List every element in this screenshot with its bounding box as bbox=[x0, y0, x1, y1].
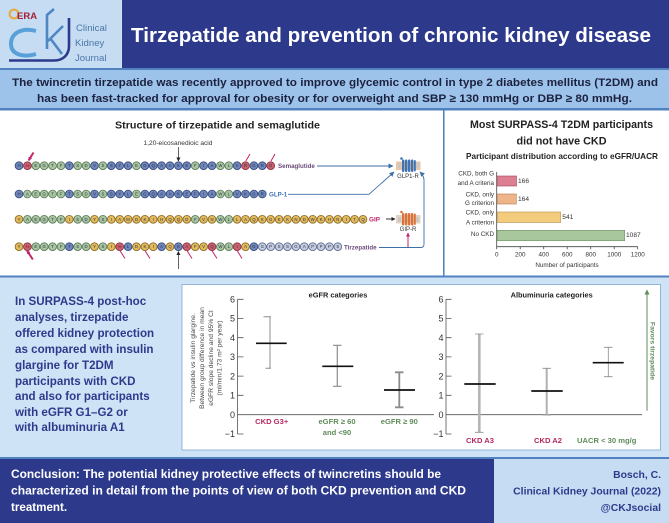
peptide chain: semaglutide bbox=[15, 162, 275, 170]
y-axis title: eGFR slope decline and 95% CI bbox=[208, 310, 215, 406]
chart: eGFR categories: −1 bbox=[225, 429, 235, 439]
citation panel: @CKJsocial bbox=[601, 503, 661, 514]
bar chart: participants by criteria: 1000 bbox=[607, 252, 622, 258]
chart: eGFR categories: and <90 bbox=[323, 428, 351, 437]
chart: eGFR categories: eGFR ≥ 60 bbox=[318, 417, 356, 426]
y-axis title: Tirzepatide vs insulin glargine. bbox=[190, 313, 197, 403]
peptide chain: GLP-1: HAEGTFTSDVSSYLEGQAAKEFIAWLVKGR bbox=[17, 192, 264, 196]
bar chart: participants by criteria: 800 bbox=[585, 252, 596, 258]
bar chart: participants by criteria bbox=[458, 170, 645, 269]
subheading: chart title: Participant distribution according to eGFR/UACR bbox=[466, 151, 658, 161]
conclusion panel: characterized in detail from the points of view of both CKD prevention and CKD bbox=[11, 484, 466, 498]
summary band: has been fast-tracked for approval for obesity or for overweight and SBP ≥ 130 mmHg or DBP ≥ 80 mmHg. bbox=[37, 93, 632, 105]
peptide chain: tirzepatide: Aib bbox=[26, 245, 30, 249]
bar chart: participants by criteria: 200 bbox=[515, 252, 526, 258]
conclusion panel: treatment. bbox=[11, 501, 67, 514]
bar chart: participants by criteria: 541 bbox=[562, 214, 574, 221]
peptide chain: semaglutide: Aib bbox=[26, 164, 30, 168]
summary band: The twincretin tirzepatide was recently approved to improve glycemic control in type 2 diabetes mellitus (T2DM) and bbox=[12, 77, 658, 89]
bar chart: participants by criteria: No CKD bbox=[471, 231, 494, 238]
text block: post-hoc analyses: In SURPASS-4 post-hoc bbox=[15, 295, 147, 308]
citation panel: Bosch, C. bbox=[613, 470, 661, 481]
arrow: favors tirzepatide bbox=[647, 290, 656, 411]
panel: structure of tirzepatide and semaglutide bbox=[0, 110, 445, 276]
bar chart: participants by criteria: G criterion bbox=[465, 200, 494, 207]
bar chart: participants by criteria: Number of participants bbox=[535, 262, 599, 269]
arrow: tirzepatide to GLP1-R bbox=[379, 172, 424, 248]
icon: ERA logo: ERA bbox=[17, 11, 37, 22]
sequence label: tirzepatide: Tirzepatide bbox=[344, 244, 377, 252]
sequence label: GLP-1: GLP-1 bbox=[269, 192, 288, 198]
conclusion panel: Conclusion: The potential kidney protective effects of twincretins should be bbox=[11, 468, 442, 481]
peptide chain: GIP: YAEGTFISDYSIAMDKIHQQDFVNWLLAQKGKKNDWKHNITQ bbox=[18, 217, 365, 222]
bar chart: participants by criteria: 164 bbox=[518, 196, 529, 203]
icon: GLP1-R receptor bbox=[396, 157, 420, 180]
text block: post-hoc analyses: as compared with insulin bbox=[15, 343, 154, 356]
chart: eGFR categories bbox=[225, 290, 434, 439]
bar chart: participants by criteria: 400 bbox=[538, 252, 549, 258]
bar chart: participants by criteria: CKD, only bbox=[466, 209, 495, 216]
text block: post-hoc analyses: offered kidney protection bbox=[15, 327, 154, 340]
peptide chain: tirzepatide bbox=[15, 243, 342, 251]
chart: eGFR categories: CKD G3+ bbox=[255, 417, 289, 426]
bar chart: participants by criteria: 0 bbox=[495, 252, 499, 258]
chart: eGFR categories: 5 bbox=[230, 314, 235, 324]
sequence label: semaglutide: Semaglutide bbox=[278, 163, 315, 170]
chart: albuminuria categories: 4 bbox=[438, 333, 444, 343]
text block: post-hoc analyses: analyses, tirzepatide bbox=[15, 311, 129, 324]
chart: eGFR categories: 0 bbox=[230, 410, 235, 420]
peptide chain: GIP bbox=[15, 215, 367, 223]
chart: eGFR categories: 3 bbox=[230, 352, 235, 362]
journal name: Journal bbox=[75, 53, 106, 64]
chart: albuminuria categories: CKD A2 bbox=[534, 436, 562, 445]
chart: eGFR categories: 2 bbox=[230, 371, 235, 381]
header title bar bbox=[122, 0, 669, 68]
text block: post-hoc analyses: and also for participants bbox=[15, 390, 150, 403]
icon: GIP-R receptor bbox=[396, 211, 420, 233]
sequence label: GIP: GIP bbox=[369, 216, 381, 224]
arrow: GIP to GIP-R bbox=[386, 218, 395, 220]
arrows: fatty acid attachment bbox=[177, 147, 179, 269]
bar chart: participants by criteria: and A criteria bbox=[458, 180, 494, 187]
text block: post-hoc analyses: with albuminuria A1 bbox=[14, 421, 125, 434]
chart: albuminuria categories: UACR < 30 mg/g bbox=[577, 436, 637, 445]
peptide chain: tirzepatide: Aib bbox=[118, 245, 122, 249]
bar chart: participants by criteria: 600 bbox=[562, 252, 573, 258]
y-axis title: Between group difference in mean bbox=[199, 307, 206, 409]
heading: structure: Structure of tirzepatide and semaglutide bbox=[115, 120, 320, 132]
chart: albuminuria categories: 2 bbox=[438, 371, 444, 381]
bar chart: participants by criteria: A criterion bbox=[466, 219, 494, 226]
text block: post-hoc analyses: with eGFR G1–G2 or bbox=[14, 406, 128, 419]
bar chart: participants by criteria: 166 bbox=[518, 178, 529, 185]
chart: eGFR categories: 1 bbox=[230, 390, 235, 400]
chart: albuminuria categories: 5 bbox=[438, 314, 444, 324]
chart: albuminuria categories: 3 bbox=[438, 352, 444, 362]
chart: albuminuria categories: 0 bbox=[438, 410, 444, 420]
journal name: Kidney bbox=[75, 38, 105, 49]
chart: albuminuria categories: CKD A3 bbox=[466, 436, 494, 445]
citation panel: Clinical Kidney Journal (2022) bbox=[513, 486, 661, 498]
icon: GLP1-R receptor: GLP1-R bbox=[397, 174, 419, 180]
chart title: albuminuria categories: Albuminuria categories bbox=[511, 290, 593, 300]
arrow: favors tirzepatide: Favors tirzepatide bbox=[648, 322, 656, 380]
bar chart: participants by criteria: CKD, both G bbox=[458, 170, 494, 177]
chart: albuminuria categories: 6 bbox=[438, 294, 444, 304]
text block: post-hoc analyses: participants with CKD bbox=[15, 375, 135, 388]
heading: most participants did not have CKD: did not have CKD bbox=[516, 136, 606, 148]
chart: eGFR categories: 4 bbox=[230, 333, 235, 343]
bar chart: participants by criteria: CKD, only bbox=[466, 191, 495, 198]
panel: participant distribution bbox=[445, 110, 669, 276]
bar chart: participants by criteria: 1087 bbox=[626, 232, 641, 239]
citation panel bbox=[494, 459, 669, 523]
arrows: modified residue markers bbox=[27, 152, 275, 260]
bar chart: participants by criteria: 1200 bbox=[631, 252, 645, 258]
header logo panel bbox=[0, 0, 121, 68]
journal name: Clinical bbox=[76, 23, 107, 34]
y-axis title: (ml/min/1.73 m² per year) bbox=[216, 320, 224, 396]
arrow: semaglutide to GLP1-R bbox=[317, 165, 393, 167]
arrow: tirzepatide to GIP-R bbox=[407, 233, 409, 247]
chart title: eGFR categories: eGFR categories bbox=[309, 290, 367, 300]
icon: CKJ logo mark bbox=[9, 9, 69, 60]
summary band bbox=[0, 68, 669, 110]
heading: most participants did not have CKD: Most SURPASS-4 T2DM participants bbox=[470, 119, 653, 131]
chart: albuminuria categories: −1 bbox=[433, 429, 444, 439]
peptide chain: GLP-1 bbox=[15, 190, 266, 198]
label: eicosanedioic acid: 1,20-eicosanedioic acid bbox=[144, 140, 213, 147]
chart: eGFR categories: eGFR ≥ 90 bbox=[381, 417, 418, 426]
icon: GIP-R receptor: GIP-R bbox=[400, 227, 417, 233]
rule under top panels bbox=[0, 276, 669, 278]
chart: albuminuria categories bbox=[433, 290, 642, 445]
header title bar: Tirzepatide and prevention of chronic kidney disease bbox=[131, 25, 651, 47]
arrow: GLP-1 to GLP1-R bbox=[288, 172, 394, 194]
panel: forest plots bbox=[182, 284, 660, 450]
peptide chain: tirzepatide: YEGTFTSDYSILDKIAQKAFVQWLIAGGPSSGAPPPS bbox=[18, 244, 339, 249]
conclusion panel bbox=[0, 457, 669, 523]
peptide chain: semaglutide: HEGTFTSDVSSYLEGQAAKEFIAWLVRGRG bbox=[17, 163, 273, 168]
text block: post-hoc analyses: glargine for T2DM bbox=[15, 359, 114, 372]
chart: eGFR categories: 6 bbox=[230, 294, 235, 304]
chart: albuminuria categories: 1 bbox=[438, 390, 444, 400]
